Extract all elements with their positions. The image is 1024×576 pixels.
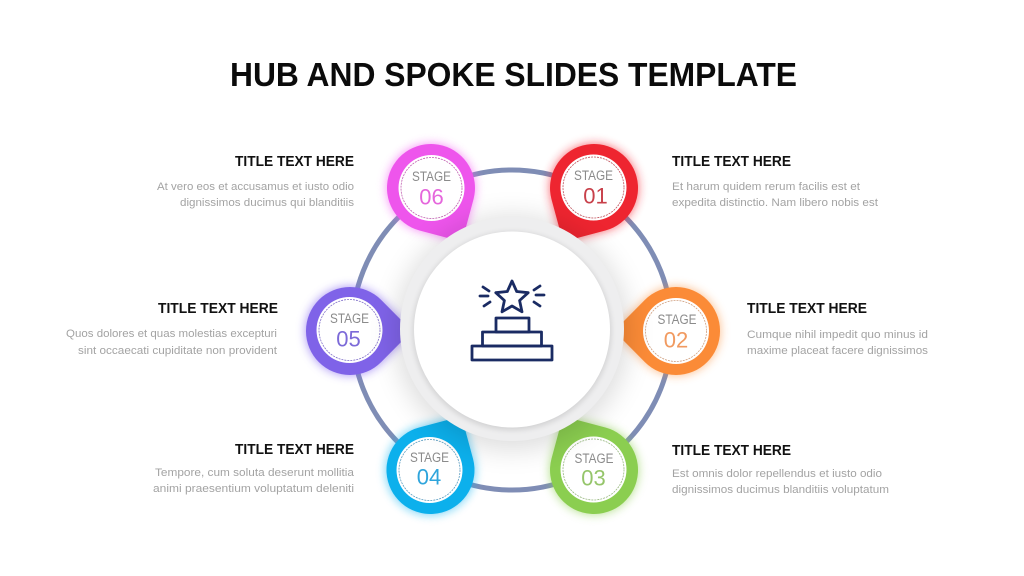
- stage 04 badge: 04: [417, 464, 441, 490]
- text block: stage 06: At vero eos et accusamus et iusto odio: [157, 181, 354, 193]
- text block: stage 01: TITLE TEXT HERE: [672, 153, 791, 170]
- text block: stage 01: [672, 153, 878, 209]
- stage 01 badge: 01: [583, 184, 608, 208]
- stage 03 badge: 03: [581, 466, 606, 490]
- text block: stage 04: TITLE TEXT HERE: [235, 441, 354, 458]
- stage 02 badge: [614, 287, 720, 375]
- text block: stage 01: Et harum quidem rerum facilis est et: [672, 181, 860, 193]
- text block: stage 02: maxime placeat facere dignissimos: [747, 345, 929, 357]
- stage 06 badge: 06: [419, 184, 444, 210]
- stage 06 badge: STAGE: [412, 169, 451, 184]
- stage 03 badge: [525, 394, 654, 530]
- stage 03 badge: STAGE: [574, 451, 614, 466]
- text block: stage 03: [672, 442, 889, 496]
- central hub: [396, 217, 628, 449]
- text block: stage 04: animi praesentium voluptatum deleniti: [153, 483, 354, 495]
- text block: stage 06: TITLE TEXT HERE: [235, 153, 354, 170]
- text block: stage 01: expedita distinctio. Nam libero nobis est: [672, 197, 878, 209]
- text block: stage 03: Est omnis dolor repellendus et iusto odio: [672, 468, 882, 480]
- stage 04 badge: [370, 394, 500, 530]
- text block: stage 04: [153, 441, 355, 495]
- stage 01 badge: [525, 128, 654, 264]
- stage 05 badge: [306, 287, 412, 375]
- text block: stage 06: [157, 153, 355, 209]
- text block: stage 05: TITLE TEXT HERE: [158, 300, 278, 317]
- text block: stage 04: Tempore, cum soluta deserunt mollitia: [155, 467, 355, 479]
- stage 01 badge: STAGE: [574, 168, 613, 183]
- stage 06 badge: [371, 128, 500, 264]
- text block: stage 03: TITLE TEXT HERE: [672, 442, 791, 459]
- text block: stage 06: dignissimos ducimus qui blanditiis: [180, 197, 355, 209]
- text block: stage 05: [66, 300, 278, 357]
- stage 05 badge: 05: [336, 326, 361, 352]
- text block: stage 05: Quos dolores et quas molestias excepturi: [66, 328, 277, 340]
- spoke ring: [352, 170, 672, 490]
- stage 04 badge: STAGE: [410, 450, 449, 465]
- text block: stage 02: [747, 300, 929, 357]
- text block: stage 05: sint occaecati cupiditate non provident: [78, 345, 277, 357]
- text block: stage 02: Cumque nihil impedit quo minus id: [747, 329, 928, 341]
- stage 02 badge: 02: [664, 328, 688, 352]
- text block: stage 03: dignissimos ducimus blanditiis voluptatum: [672, 484, 889, 496]
- icon: podium with star: [472, 281, 552, 360]
- stage 02 badge: STAGE: [658, 312, 696, 327]
- text block: stage 02: TITLE TEXT HERE: [747, 300, 867, 317]
- title: HUB AND SPOKE SLIDES TEMPLATE: [230, 56, 797, 93]
- stage 05 badge: STAGE: [330, 311, 369, 326]
